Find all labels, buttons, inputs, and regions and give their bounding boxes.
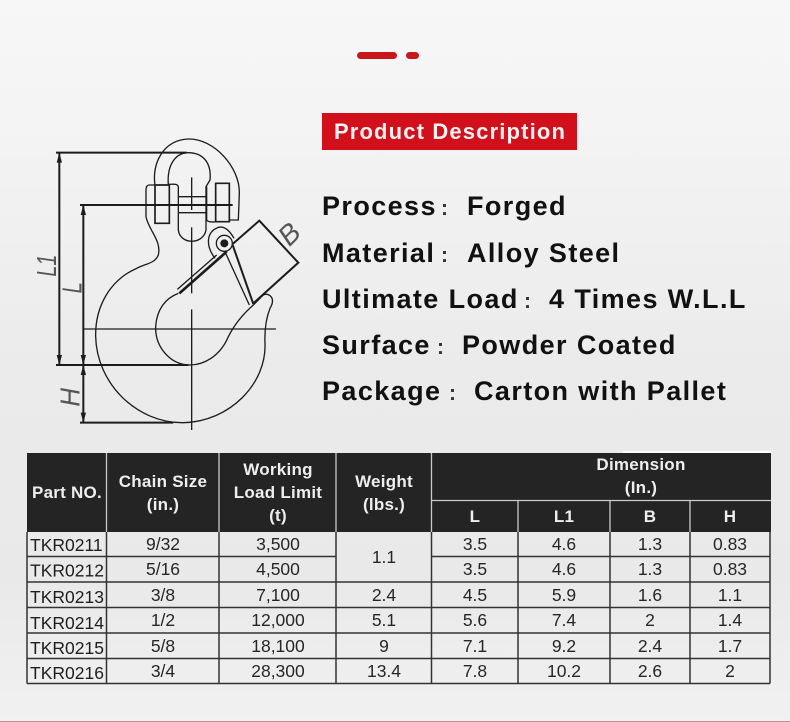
table header: Dimension <box>596 455 686 474</box>
clevis blocks <box>155 183 229 223</box>
table header: (in.) <box>147 495 179 514</box>
table header: (lbs.) <box>363 495 405 514</box>
table rows: 1.6 <box>638 585 662 605</box>
dimension labels: H <box>54 387 85 407</box>
table rows: 4.6 <box>552 559 576 579</box>
heading: Product Description: Product Description <box>334 119 566 144</box>
table header: Weight <box>355 472 413 491</box>
table rows: 1.3 <box>638 534 662 554</box>
table rows: 28,300 <box>251 661 305 681</box>
table rows: 12,000 <box>251 610 305 630</box>
product specifications: Alloy Steel <box>467 238 620 268</box>
product specifications: : <box>449 382 456 405</box>
table rows: 0.83 <box>713 559 747 579</box>
table header: (In.) <box>625 478 657 497</box>
centre line <box>190 177 194 430</box>
table rows: 5/8 <box>151 636 175 656</box>
table rows <box>30 534 747 683</box>
table rows: 2 <box>725 661 735 681</box>
table header: Working <box>243 460 313 479</box>
specification table <box>27 451 772 684</box>
table header: L1 <box>554 507 574 526</box>
table rows: 1.3 <box>638 559 662 579</box>
table rows: 1/2 <box>151 610 175 630</box>
dimension lines <box>56 153 276 423</box>
table rows: 5.1 <box>372 610 396 630</box>
product specifications: Ultimate Load <box>322 284 519 314</box>
table rows: 4.6 <box>552 534 576 554</box>
table grid <box>27 532 770 684</box>
table header: (t) <box>269 506 287 525</box>
product specifications: : <box>437 336 444 359</box>
heading: Product Description <box>322 113 577 150</box>
latch and pivot <box>177 227 249 305</box>
table rows: 9 <box>379 636 389 656</box>
table rows: 3,500 <box>256 534 300 554</box>
table header: Chain Size <box>119 472 207 491</box>
table rows: 3.5 <box>463 559 487 579</box>
table rows: TKR0213 <box>30 587 104 607</box>
table rows: 3.5 <box>463 534 487 554</box>
dimension labels: B <box>272 216 307 252</box>
table header: Part NO. <box>32 483 102 502</box>
table rows: 4.5 <box>463 585 487 605</box>
hook body <box>96 185 272 423</box>
dimension labels <box>31 216 307 407</box>
decorative red accent <box>357 52 419 59</box>
table rows: 2 <box>645 610 655 630</box>
arrowheads <box>57 153 86 423</box>
dimension labels: L1 <box>31 255 62 277</box>
table rows: TKR0211 <box>30 535 103 555</box>
table rows: TKR0214 <box>30 613 104 633</box>
table rows: 10.2 <box>547 661 581 681</box>
product specifications: : <box>524 290 531 313</box>
product specifications: Surface <box>322 330 431 360</box>
product specifications: 4 Times W.L.L <box>549 284 747 314</box>
product specifications: Carton with Pallet <box>474 376 727 406</box>
table rows: 0.83 <box>713 534 747 554</box>
table rows: 2.4 <box>372 585 396 605</box>
table header: Load Limit <box>234 483 322 502</box>
table rows: TKR0212 <box>30 560 104 580</box>
table rows: 2.4 <box>638 636 662 656</box>
table rows: TKR0216 <box>30 663 104 683</box>
table rows: 9.2 <box>552 636 576 656</box>
hook technical drawing <box>31 139 307 430</box>
table rows: 7.8 <box>463 661 487 681</box>
table rows: 3/4 <box>151 661 175 681</box>
clevis <box>154 139 239 241</box>
table rows: 9/32 <box>146 534 180 554</box>
product specifications: : <box>441 244 448 267</box>
table rows: 5.9 <box>552 585 576 605</box>
table rows: 1.7 <box>718 636 742 656</box>
product specifications: Powder Coated <box>462 330 677 360</box>
table rows: 4,500 <box>256 559 300 579</box>
product specifications: Material <box>322 238 435 268</box>
table rows: 1.4 <box>718 610 742 630</box>
table rows: 18,100 <box>251 636 305 656</box>
table header: L <box>470 507 480 526</box>
table rows: 2.6 <box>638 661 662 681</box>
dimension B <box>233 221 298 303</box>
table rows: 7,100 <box>256 585 300 605</box>
product specifications: Package <box>322 376 441 406</box>
product specifications <box>322 191 747 406</box>
product specifications: Process <box>322 191 437 221</box>
product specifications: : <box>441 197 448 220</box>
table header: H <box>724 507 736 526</box>
table header: B <box>644 507 656 526</box>
table rows: 3/8 <box>151 585 175 605</box>
table rows: 1.1 <box>718 585 742 605</box>
table rows: TKR0215 <box>30 638 104 658</box>
table rows: 1.1 <box>372 547 396 567</box>
table rows: 5.6 <box>463 610 487 630</box>
table header <box>27 453 771 532</box>
dimension labels: L <box>56 282 87 293</box>
table rows: 13.4 <box>367 661 401 681</box>
table rows: 7.1 <box>463 636 487 656</box>
product specifications: Forged <box>467 191 567 221</box>
table rows: 7.4 <box>552 610 576 630</box>
table rows: 5/16 <box>146 559 180 579</box>
